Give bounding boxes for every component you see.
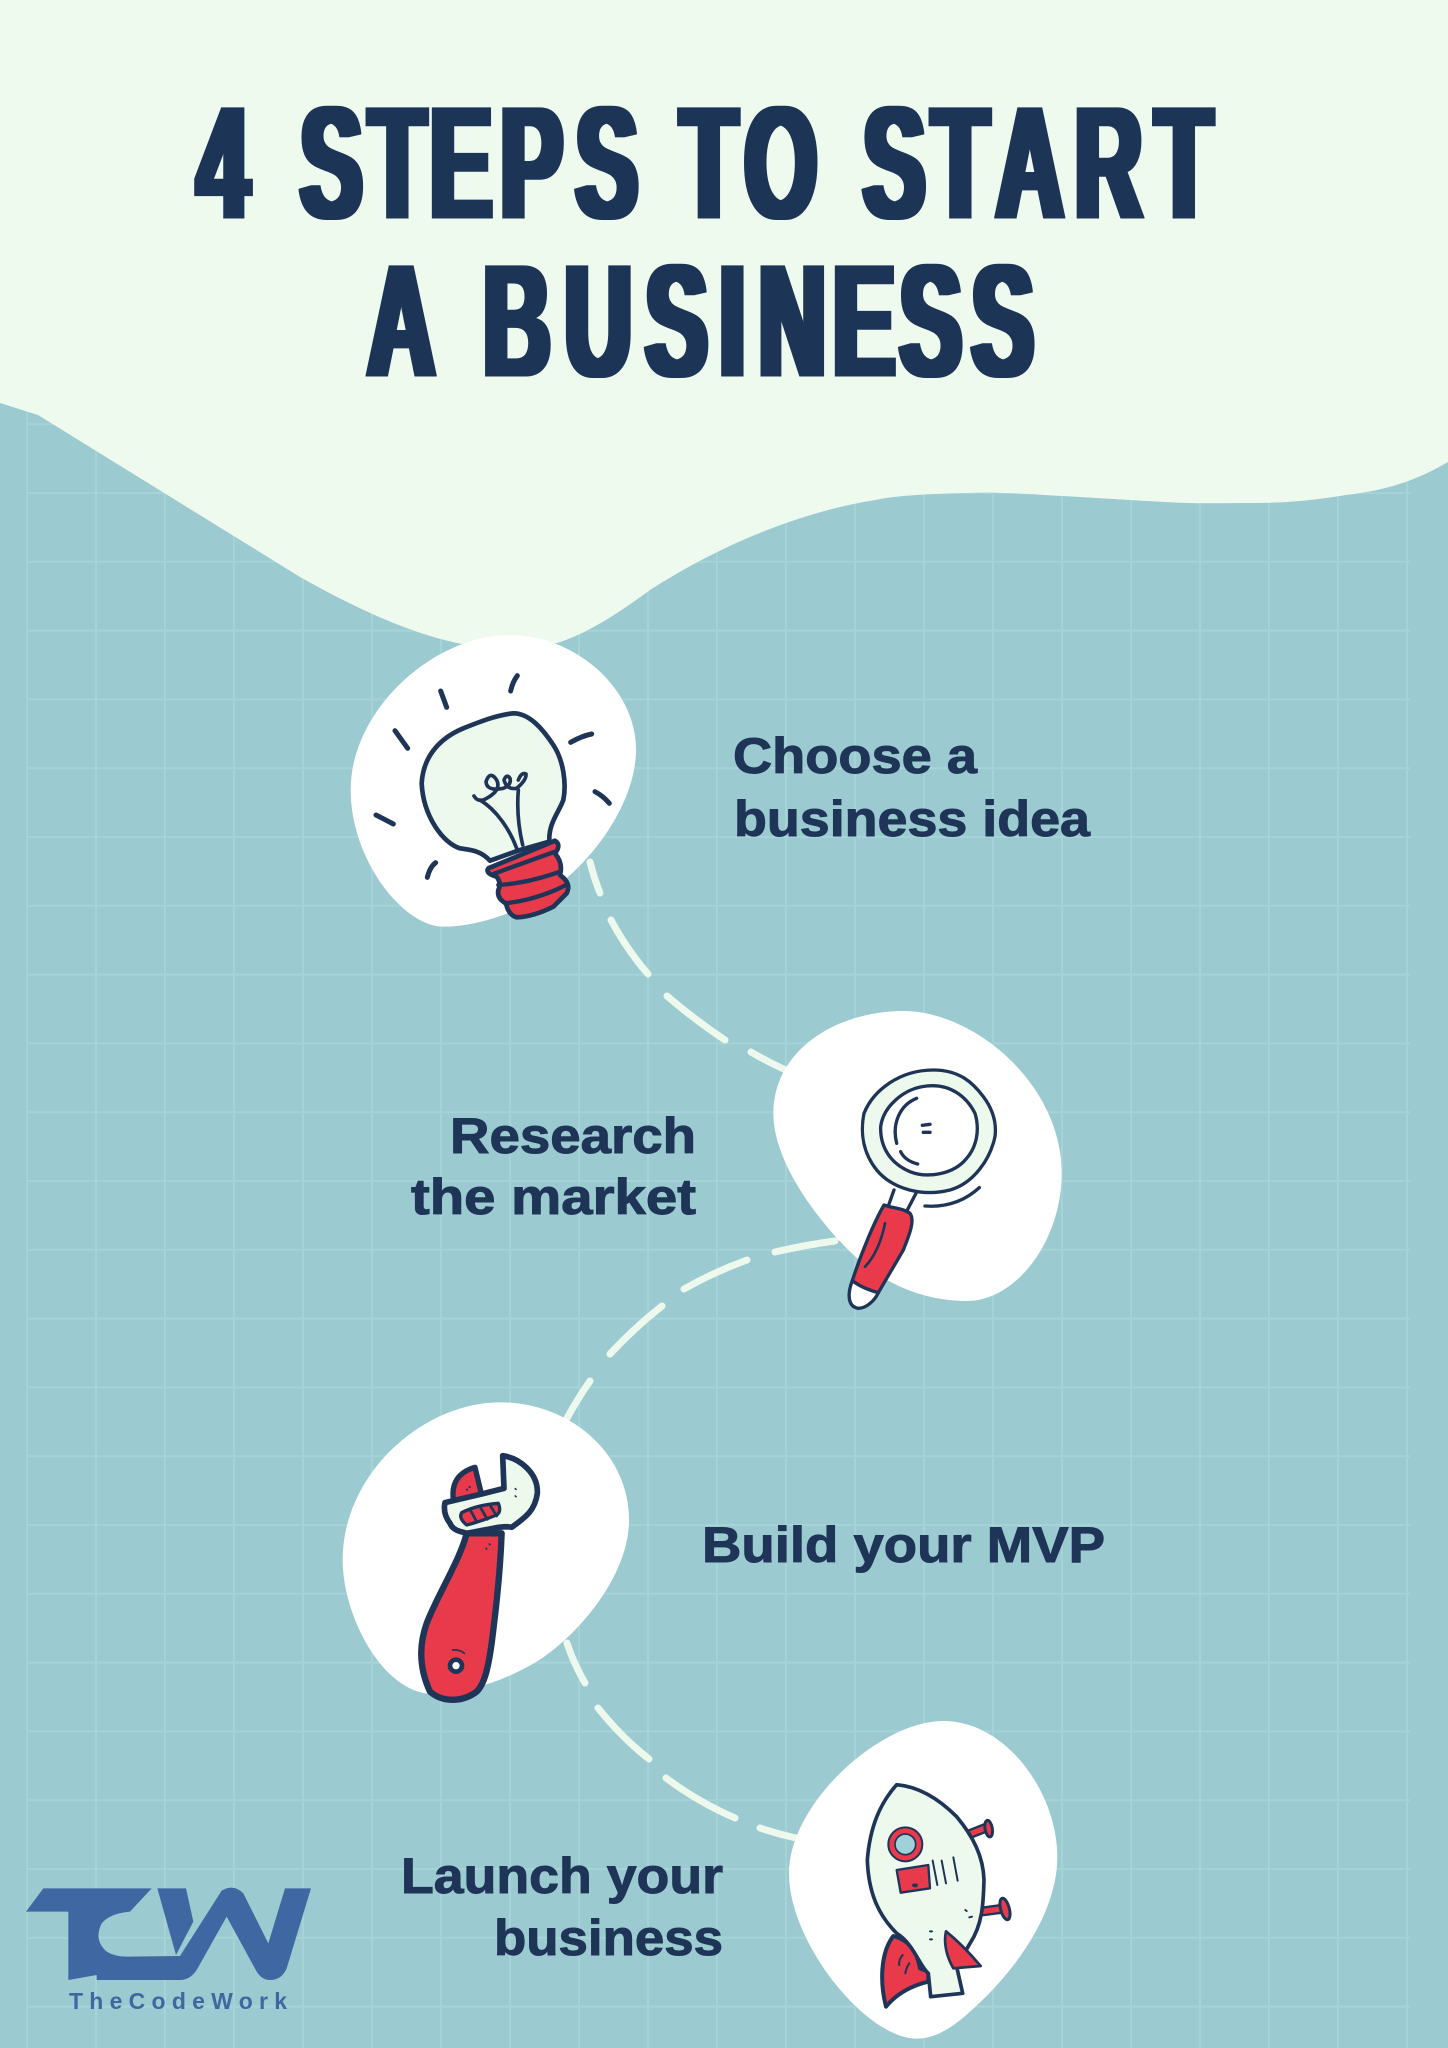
step 2 label: Research bbox=[450, 1108, 696, 1164]
dashed connector: step 2 to 3 bbox=[566, 1241, 835, 1420]
step 4 label: Launch your bbox=[401, 1848, 723, 1904]
step 3: blob and wrench icon bbox=[343, 1402, 629, 1700]
dashed connector: step 1 to 2 bbox=[590, 862, 790, 1072]
logo: TheCodeWork bbox=[26, 1888, 311, 2014]
step 2 label bbox=[411, 1108, 696, 1225]
step 1 label bbox=[733, 728, 1091, 847]
logo wordmark: TheCodeWork bbox=[69, 1988, 287, 2014]
dashed connector: step 3 to 4 bbox=[567, 1643, 796, 1838]
icon: light bulb bbox=[376, 676, 609, 917]
step 2 label: the market bbox=[411, 1169, 696, 1225]
header wave bbox=[0, 0, 1448, 650]
icon: rocket bbox=[867, 1785, 1012, 2007]
step 1: blob and light bulb icon bbox=[351, 635, 636, 927]
icon: magnifying glass bbox=[849, 1070, 995, 1308]
logo mark bbox=[26, 1888, 311, 1980]
step 1 label: business idea bbox=[734, 791, 1091, 847]
step 4 label: business bbox=[494, 1910, 723, 1966]
title bbox=[197, 74, 1212, 410]
step 3 label: Build your MVP bbox=[702, 1517, 1105, 1573]
title: A BUSINESS bbox=[368, 232, 1034, 410]
title: 4 STEPS TO START bbox=[197, 74, 1212, 252]
icon: wrench bbox=[421, 1456, 537, 1700]
step 2: blob and magnifier icon bbox=[773, 1011, 1062, 1308]
step 1 label: Choose a bbox=[733, 728, 978, 784]
step 4 label bbox=[401, 1848, 723, 1966]
step 4: blob and rocket icon bbox=[789, 1721, 1057, 2039]
